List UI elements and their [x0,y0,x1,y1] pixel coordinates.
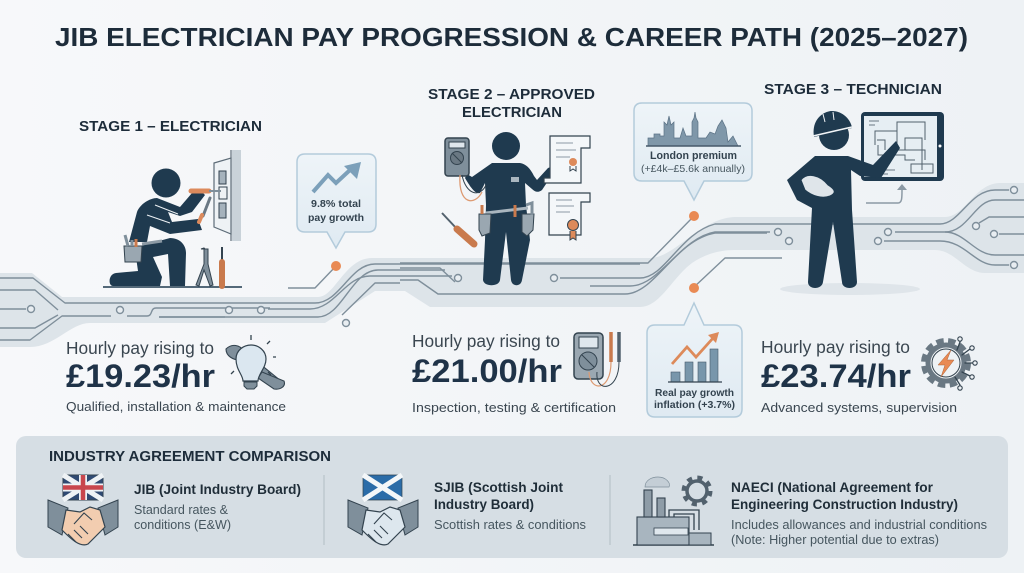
icon: UK flag [63,475,103,500]
stage 3 figure: technician with tablet [780,111,944,295]
stage 2 pay block: £21.00/hr [412,353,562,389]
callout: total pay growth: 9.8% total [311,198,361,210]
SJIB text: Scottish rates & conditions [434,518,586,532]
icon: handshake (JIB) [48,500,118,545]
SJIB text: Industry Board) [434,497,534,512]
stage 3 pay block: £23.74/hr [761,358,911,394]
NAECI text [731,480,987,547]
JIB text: conditions (E&W) [134,518,231,532]
panel: industry agreement comparison [16,436,1008,558]
stage 3 pay block: Advanced systems, supervision [761,400,957,415]
stage 2 pay block: Hourly pay rising to [412,331,560,351]
callout: London premium: (+£4k–£5.6k annually) [641,163,745,175]
orange junction dots [331,211,699,293]
stage 1 figure: kneeling electrician [103,150,242,287]
callout: London premium: London premium [650,150,737,162]
NAECI text: Engineering Construction Industry) [731,497,958,512]
callout: total pay growth [297,154,376,248]
JIB text: Standard rates & [134,503,229,517]
callout: total pay growth: pay growth [308,212,364,224]
stage 1 pay block: Hourly pay rising to [66,338,214,358]
stage 1 pay block: Qualified, installation & maintenance [66,399,286,414]
SJIB text: SJIB (Scottish Joint [434,480,564,495]
callout: London premium [634,103,752,200]
NAECI text: Includes allowances and industrial conditions [731,518,987,532]
stage 1 pay block: £19.23/hr [66,358,215,394]
stage 2 heading: ELECTRICIAN [462,105,562,121]
stage 1 pay block [66,338,286,414]
stage 3 heading: STAGE 3 – TECHNICIAN [764,82,942,98]
callout: real pay growth: Real pay growth [655,387,734,399]
icon: handshake (SJIB) [348,500,418,545]
JIB text [134,482,301,532]
stage 1 heading: STAGE 1 – ELECTRICIAN [79,119,262,135]
title: JIB ELECTRICIAN PAY PROGRESSION & CAREER PATH (2025–2027) [55,22,968,52]
stage 2 pay block: Inspection, testing & certification [412,400,616,415]
icon: wrench and light bulb [226,335,284,389]
NAECI text: NAECI (National Agreement for [731,480,934,495]
icon: multimeter [574,332,619,386]
SJIB text [434,480,586,532]
icon: factory and gear [633,477,714,545]
icon: Scottish flag [363,475,402,500]
stage 3 pay block: Hourly pay rising to [761,337,910,357]
stage 3 pay block [761,337,957,415]
stage 2 figure: approved electrician [442,132,590,285]
NAECI text: (Note: Higher potential due to extras) [731,533,939,547]
callout: real pay growth [647,303,742,417]
icon: gear with lightning [925,337,977,390]
JIB text: JIB (Joint Industry Board) [134,482,301,497]
circuit path band [0,183,1024,347]
callout: real pay growth: inflation (+3.7%) [654,399,735,411]
panel heading: INDUSTRY AGREEMENT COMPARISON [49,449,331,465]
stage 2 pay block [412,331,616,415]
stage 2 heading: STAGE 2 – APPROVED [428,87,595,103]
stage 2 heading [428,87,595,121]
